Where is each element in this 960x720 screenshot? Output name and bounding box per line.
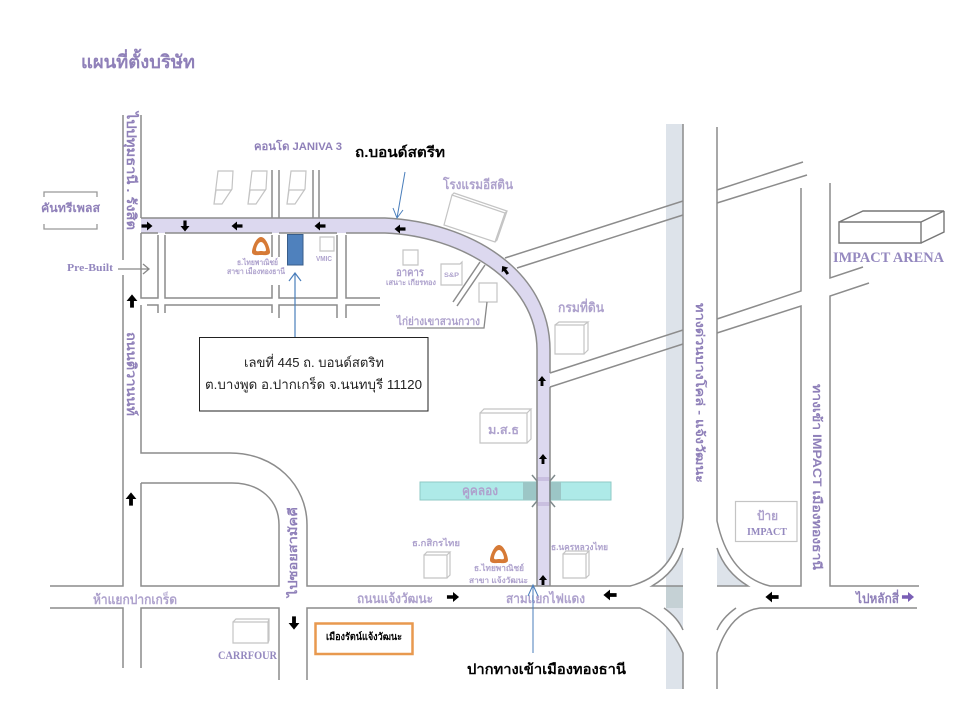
place labels: คอนโด JANIVA 3 (254, 139, 342, 153)
bank logo: Chaeng Watthana branch (490, 545, 508, 563)
buildings (214, 171, 589, 643)
place labels: กรมที่ดิน (558, 298, 604, 315)
street label: Bond Street: ถ.บอนด์สตรีท (355, 144, 445, 160)
place labels: เสนาะ เกียรทอง (386, 278, 436, 287)
place labels: อาคาร (396, 267, 424, 279)
Impact sign (736, 502, 797, 542)
vertical road labels: ไปซอยสามัคคี (285, 507, 300, 599)
place labels: สาขา เมืองทองธานี (227, 266, 285, 276)
company location marker (288, 234, 303, 265)
place labels: ถนนแจ้งวัฒนะ (357, 591, 433, 606)
place labels: S&P (444, 273, 459, 279)
address callout (200, 273, 428, 411)
place labels: คันทรีเพลส (41, 201, 101, 215)
canal (420, 482, 611, 500)
Country Place bracket (44, 192, 97, 229)
orange label box (316, 624, 412, 654)
place labels: ไปหลักสี่ (854, 589, 899, 606)
vertical road labels: ไปปทุมธานี . รังสิต (123, 110, 140, 230)
arrow: to Lak Si (902, 592, 914, 602)
bank logo: Metro branch (252, 237, 270, 255)
place labels: VMIC (316, 256, 332, 263)
place labels: ธ.ไทยพาณิชย์ (474, 563, 524, 573)
place labels: ห้าแยกปากเกร็ด (93, 590, 177, 607)
Impact sign: ป้าย (757, 509, 778, 523)
Impact sign: IMPACT (747, 526, 788, 538)
address callout: ต.บางพูด อ.ปากเกร็ด จ.นนทบุรี 11120 (205, 375, 422, 393)
place labels: ไก่ย่างเขาสวนกวาง (395, 314, 480, 328)
direction arrows (126, 220, 779, 630)
label leader lines (118, 264, 487, 328)
bridge railings (532, 475, 555, 507)
entrance callout: ปากทางเข้าเมืองทองธานี (467, 661, 626, 677)
place labels: CARRFOUR (218, 648, 277, 662)
place labels: สาขา แจ้งวัฒนะ (469, 575, 528, 585)
entrance callout (467, 585, 626, 677)
place labels: โรงแรมอีสติน (442, 176, 513, 192)
place labels: Pre-Built (67, 262, 113, 274)
place labels: ธ.นครหลวงไทย (551, 541, 608, 552)
title: แผนที่ตั้งบริษัท (81, 48, 195, 72)
expressway band (630, 124, 748, 689)
place labels: สามแยกไฟแดง (506, 590, 585, 606)
road network (50, 115, 919, 689)
street label: Bond Street (355, 144, 445, 218)
place labels: คูคลอง (462, 483, 498, 499)
vertical road labels (123, 110, 824, 599)
place labels: ธ.ไทยพาณิชย์ (237, 257, 278, 267)
Impact Arena building (839, 211, 944, 243)
address callout: เลขที่ 445 ถ. บอนด์สตริท (244, 354, 384, 370)
place labels: IMPACT ARENA (833, 250, 944, 266)
place labels: ม.ส.ธ (488, 423, 519, 437)
main road: Bond Street (141, 218, 550, 586)
vertical road labels: ถนนติวานนท์ (124, 332, 139, 416)
vertical road labels: ทางด่วนบางโคล่ - แจ้งวัฒนะ (693, 303, 708, 483)
orange label box: เมืองรัตน์แจ้งวัฒนะ (326, 631, 402, 643)
place labels: ธ.กสิกรไทย (412, 537, 460, 548)
vertical road labels: ทางเข้า IMPACT เมืองทองธานี (810, 384, 824, 571)
place labels (41, 139, 944, 662)
